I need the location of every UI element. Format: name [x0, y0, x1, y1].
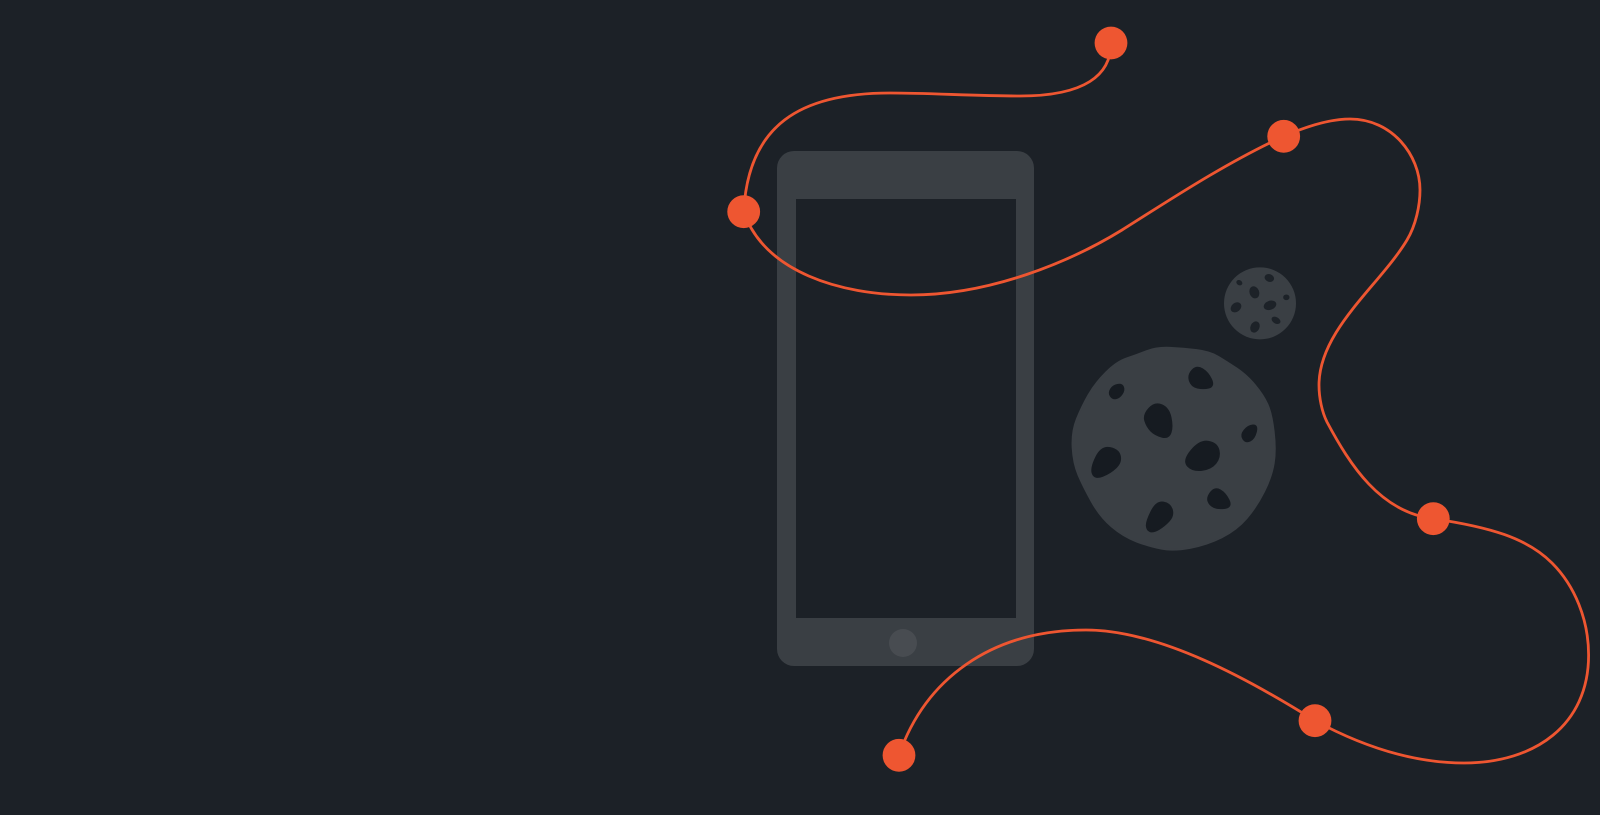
phone screen	[796, 199, 1016, 618]
node 6	[883, 739, 915, 772]
node 1	[1095, 27, 1127, 59]
small cookie body	[1224, 267, 1296, 339]
node 3	[1267, 120, 1300, 153]
node 5	[1299, 704, 1331, 737]
large cookie chips	[1092, 368, 1256, 531]
icon: large cookie	[1072, 348, 1275, 550]
node 4	[1417, 502, 1450, 535]
phone home button	[889, 629, 917, 657]
large cookie body	[1072, 348, 1275, 550]
small cookie chips	[1229, 273, 1289, 334]
orange winding path	[744, 43, 1589, 763]
icon: small cookie	[1224, 267, 1296, 339]
path nodes	[727, 27, 1450, 772]
node 2	[727, 195, 760, 228]
icon: smartphone	[777, 151, 1034, 666]
phone body	[777, 151, 1034, 666]
